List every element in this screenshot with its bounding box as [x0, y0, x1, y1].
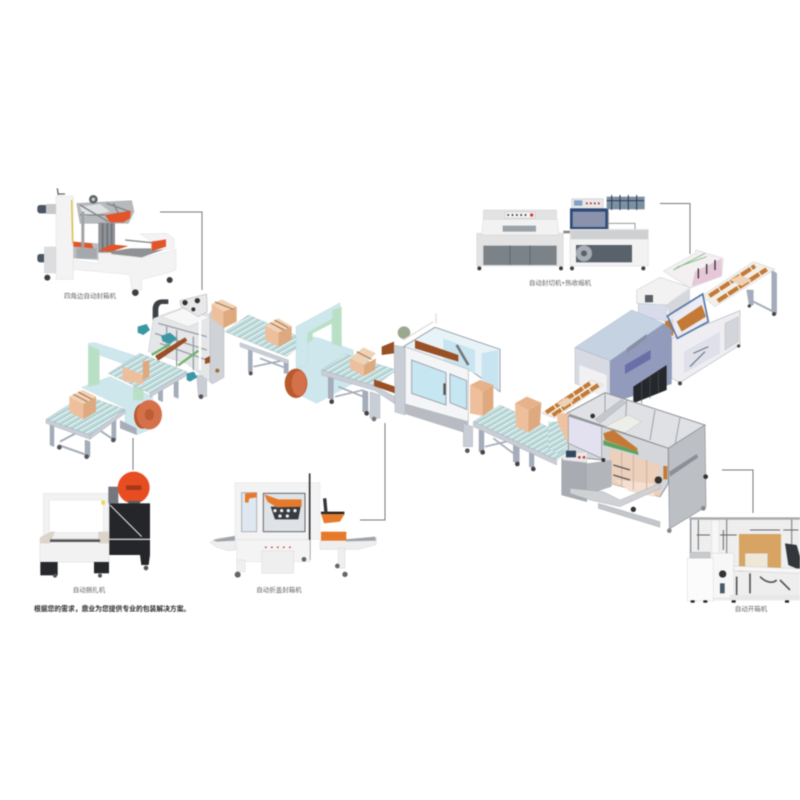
cabinet	[687, 558, 713, 601]
conveyor 1	[46, 395, 125, 459]
side mechanism	[785, 543, 800, 570]
feet	[691, 600, 789, 603]
caption: heat sealer and shrink tunnel: 自动封切机+热收缩机	[529, 278, 592, 287]
leader line: folding sealer	[360, 423, 385, 520]
film feed head	[663, 250, 723, 288]
machine: automatic flap folding sealer	[210, 473, 377, 578]
shrink tunnel on main line	[575, 310, 672, 403]
control box	[108, 487, 118, 503]
dark mechanism	[697, 520, 798, 550]
shrink tunnel unit	[477, 210, 563, 270]
carton sealer on main line	[138, 294, 224, 399]
line section: shrink tunnel and sealer on main line	[575, 250, 777, 403]
box entering carton sealer	[212, 299, 237, 328]
open box 2	[515, 397, 541, 433]
top cover inner	[605, 415, 642, 433]
box on conveyor 1	[69, 390, 96, 419]
line section: first strapping station	[46, 294, 307, 459]
rail	[734, 566, 800, 573]
line section: second strapping station and box folder	[285, 303, 583, 471]
side conveyors	[210, 536, 377, 551]
conveyor 2 and 3	[225, 315, 307, 375]
sealer head	[637, 277, 708, 338]
yellow label	[101, 501, 105, 505]
leader line: four-corner sealer	[160, 212, 202, 290]
body	[712, 553, 734, 598]
conveyor tail	[548, 422, 568, 455]
strapping machine 2	[285, 303, 353, 403]
folding belts	[374, 342, 395, 393]
infeed conveyor right	[702, 262, 777, 316]
packer infeed channels	[542, 380, 603, 418]
cardboard blank	[739, 534, 781, 571]
leader line: heat sealer	[660, 204, 690, 254]
sealer casters	[235, 557, 348, 578]
box packer enclosure	[542, 380, 708, 533]
caption: folding sealer: 自动折盖封箱机	[256, 585, 302, 594]
handle and post	[310, 473, 344, 560]
black cabinet	[109, 503, 150, 565]
console with touch panel	[562, 451, 612, 502]
conveyor 5	[473, 405, 583, 471]
caption: four-corner sealer: 四角边自动封箱机	[64, 291, 116, 300]
conveyor 4	[322, 354, 397, 421]
leader line: case erector	[722, 470, 753, 513]
enclosure and folder	[394, 313, 500, 453]
leader line: strapping machine	[132, 438, 134, 470]
gauge and valve	[719, 570, 726, 578]
box on conveyor 3	[265, 318, 292, 347]
strapper table	[40, 538, 109, 562]
floor frame	[570, 414, 708, 533]
side enclosure	[668, 425, 706, 529]
machine: automatic case erector	[687, 517, 800, 603]
pneumatics	[720, 583, 725, 593]
open box 1	[470, 380, 493, 416]
left window	[242, 493, 257, 532]
tagline: 根据您的需求，鼎业为您提供专业的包装解决方案。	[34, 604, 190, 613]
box on conveyor 4	[350, 347, 376, 376]
infeed lid rail	[595, 399, 626, 423]
control panel	[690, 552, 710, 558]
body	[235, 483, 320, 539]
front interior	[568, 415, 668, 497]
machine: four-corner automatic carton sealer	[37, 188, 176, 296]
lower frame	[237, 540, 345, 573]
strapping machine 1	[82, 343, 187, 435]
caption: case erector: 自动开箱机	[735, 604, 768, 613]
lower mechanics	[737, 573, 790, 597]
enclosure top panels	[567, 393, 705, 448]
sealer base frame	[672, 311, 740, 385]
right panel detail	[669, 454, 698, 477]
strapper feet	[40, 562, 109, 575]
L-bar sealer unit	[563, 195, 648, 270]
center window	[263, 493, 305, 532]
base	[730, 595, 800, 600]
machine: automatic strapping machine	[40, 472, 150, 578]
caption: strapping machine: 自动捆扎机	[73, 585, 106, 594]
label panel	[745, 553, 768, 570]
machine: shrink tunnel with heat sealer (top)	[477, 195, 648, 270]
casters	[53, 566, 148, 578]
peach box and door	[557, 413, 602, 458]
strap reel	[118, 472, 150, 504]
orange flaps	[245, 493, 346, 541]
